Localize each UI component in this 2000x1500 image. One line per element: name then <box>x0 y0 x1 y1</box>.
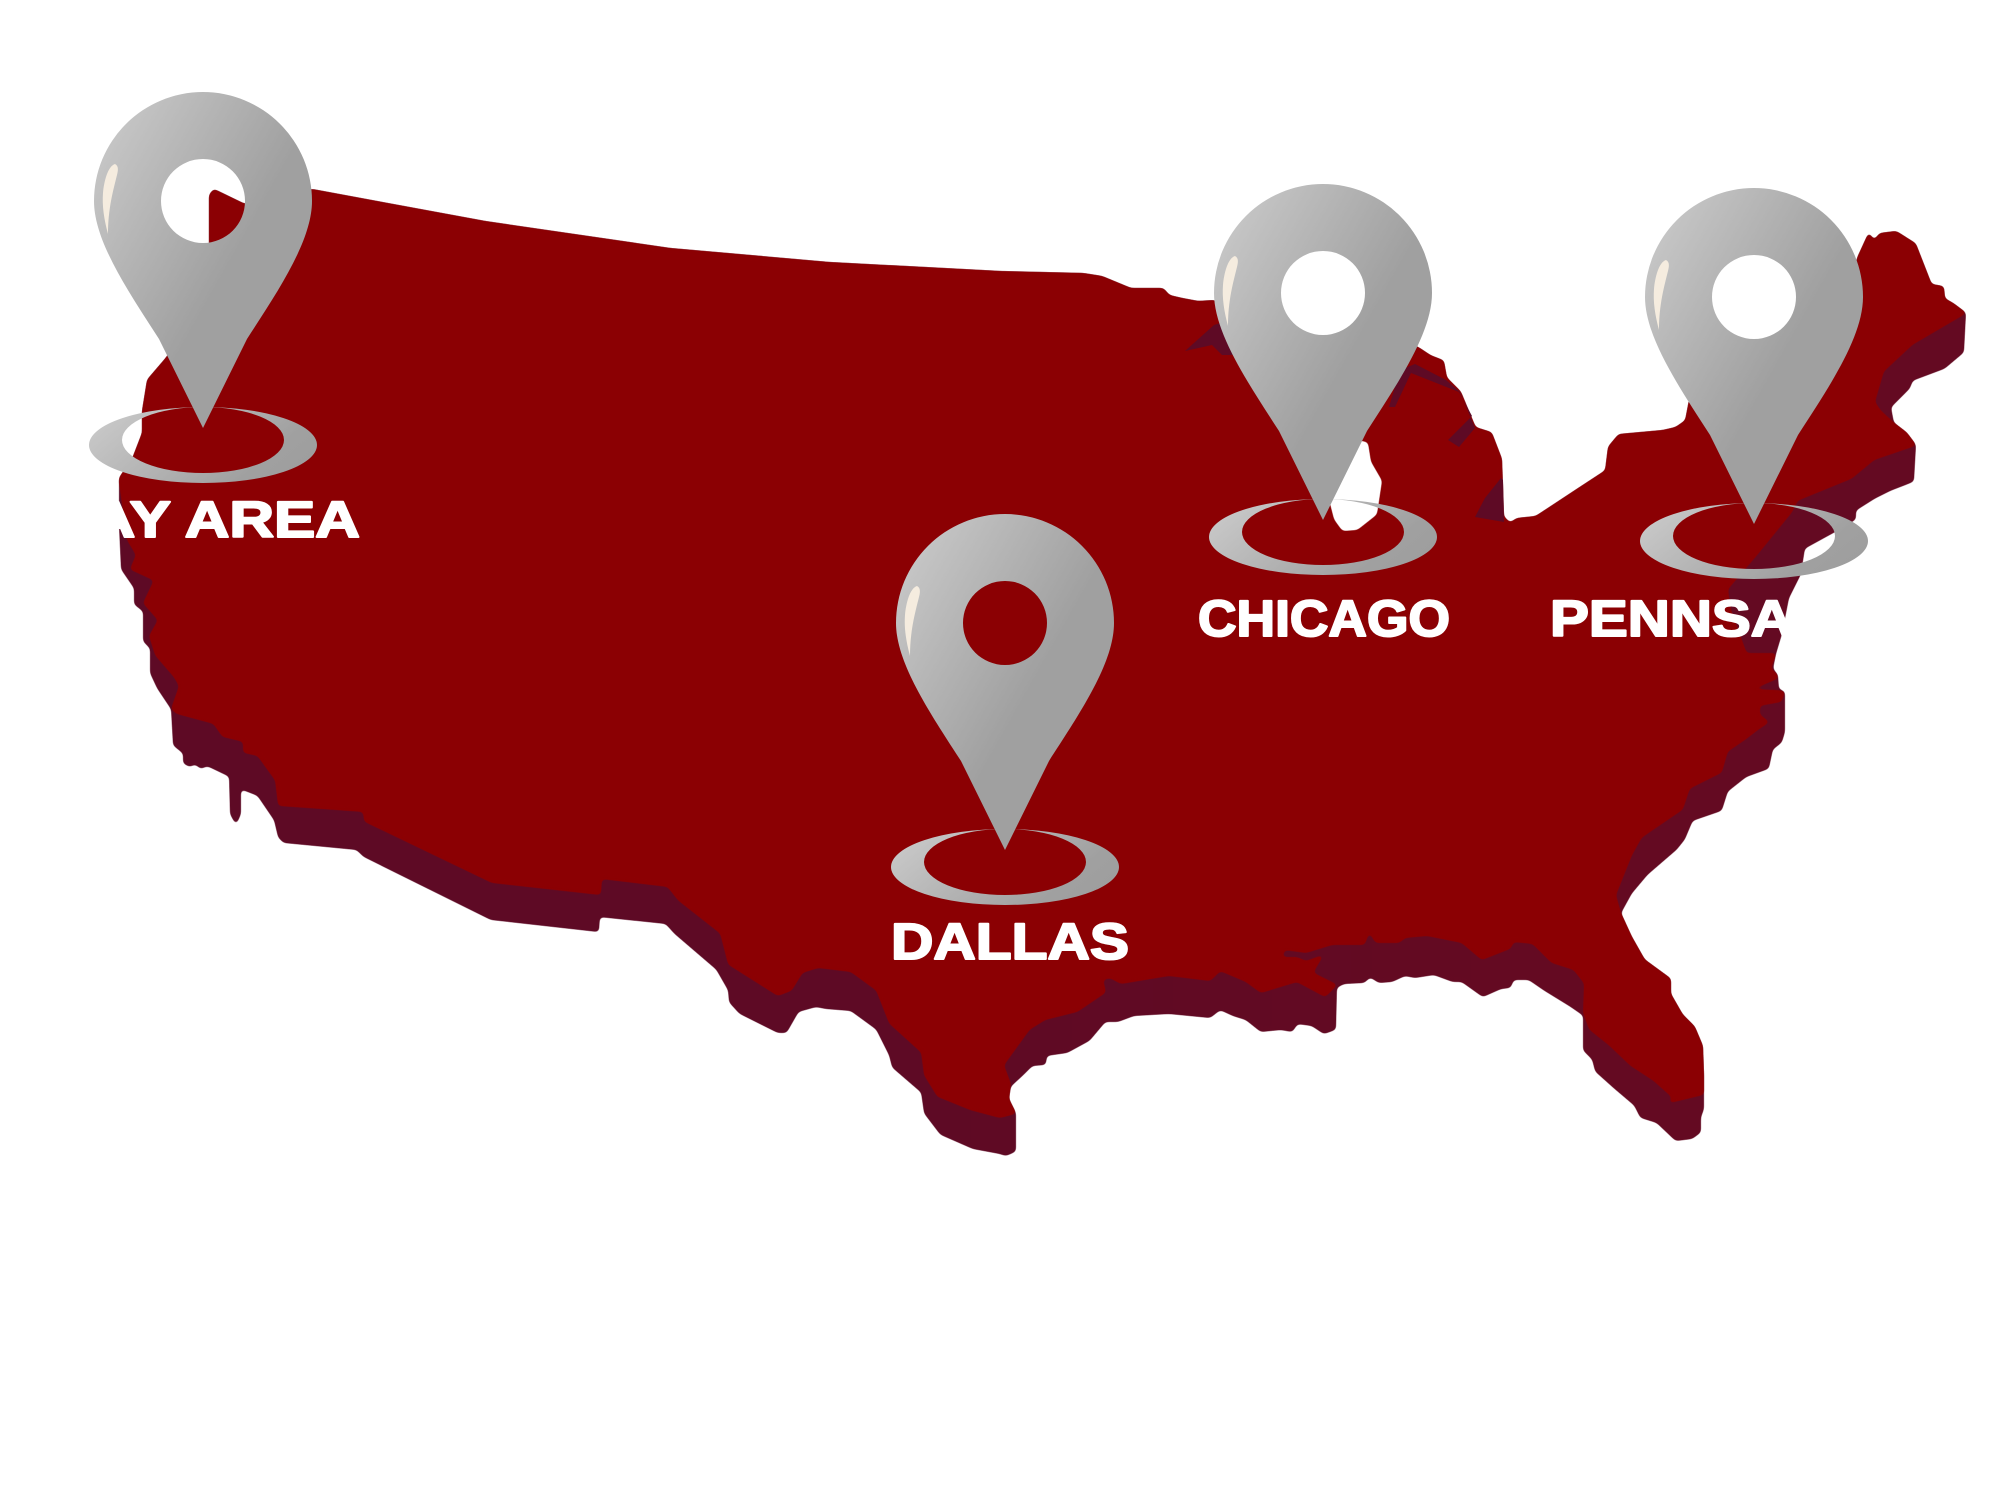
pin body <box>1214 184 1432 520</box>
pin highlight <box>905 586 920 656</box>
lake michigan cutout <box>1325 440 1381 530</box>
marker base ring <box>891 829 1119 905</box>
pin highlight <box>1654 260 1669 330</box>
location marker: Pennsauken <box>1640 188 1868 579</box>
great lakes shadow details <box>1185 320 1504 522</box>
pin highlight <box>103 164 118 234</box>
label: Bay Area: BAY AREA <box>46 491 360 548</box>
map of the United States <box>120 190 1965 1155</box>
label: Chicago: CHICAGO <box>1198 590 1450 647</box>
label: Dallas: DALLAS <box>891 913 1129 970</box>
pin body <box>896 514 1114 850</box>
pin body <box>94 92 312 428</box>
map top face <box>120 190 1965 1117</box>
location marker: Chicago <box>1209 184 1437 575</box>
marker base ring <box>89 407 317 483</box>
location marker: Dallas <box>891 514 1119 905</box>
label: Pennsauken: PENNSAUKEN <box>1550 590 1958 647</box>
marker base ring <box>1640 503 1868 579</box>
map extruded shadow <box>120 190 1965 1155</box>
location marker: Bay Area <box>89 92 317 483</box>
pin highlight <box>1223 256 1238 326</box>
marker base ring <box>1209 499 1437 575</box>
pin body <box>1645 188 1863 524</box>
